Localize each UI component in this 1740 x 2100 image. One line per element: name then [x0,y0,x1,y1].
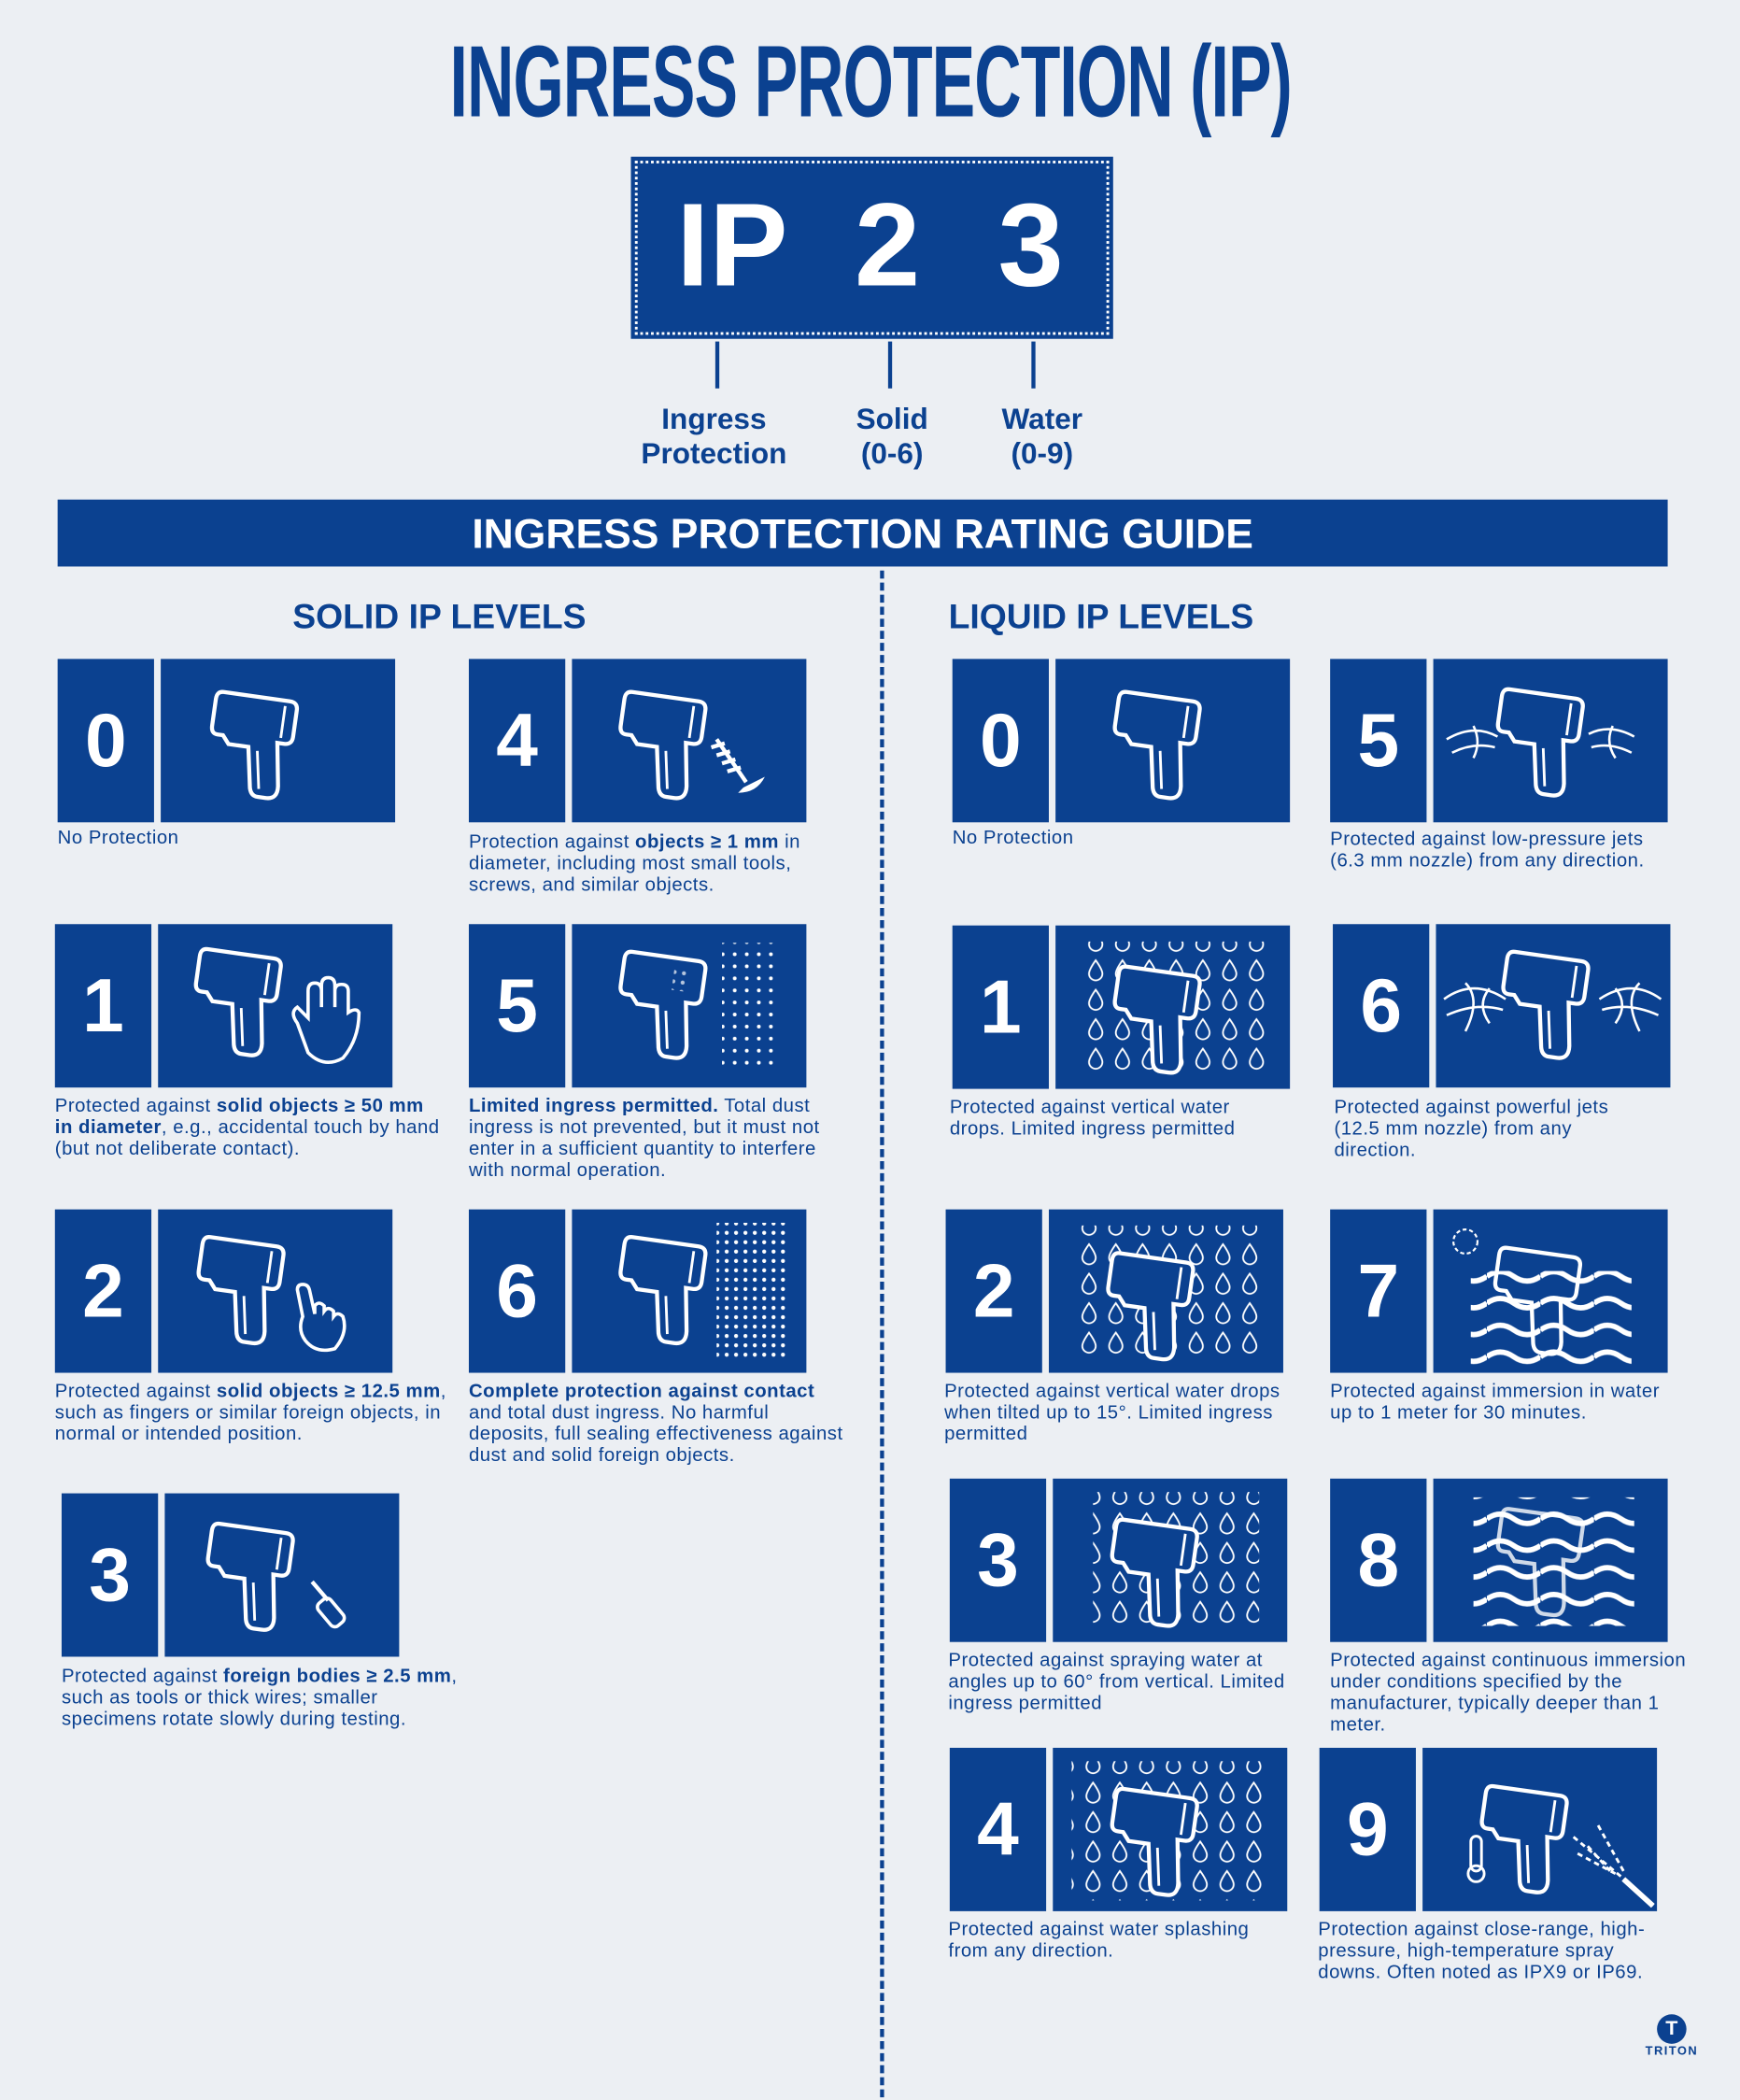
connector lines [715,342,719,389]
card: liquid 5: 5 [1357,698,1399,782]
desc: liquid 6: Protected against powerful jets (12.5 mm nozzle) from any direction. [1334,1097,1608,1161]
card: liquid 1: 1 [980,964,1022,1049]
card: solid 5: 5 [496,963,538,1047]
desc: solid 3: Protected against foreign bodies ≥ 2.5 mm, such as tools or thick wires; smaller specimens rotate slowly during testing. [62,1667,458,1730]
card: solid 6 [469,1209,807,1373]
card: solid 2 [54,1209,392,1373]
logo: triton: T [1665,2017,1677,2040]
card: liquid 8 [1330,1478,1668,1642]
card: liquid 4 [949,1747,1287,1911]
desc: liquid 1: Protected against vertical water drops. Limited ingress permitted [950,1097,1235,1140]
desc: liquid 7: Protected against immersion in water up to 1 meter for 30 minutes. [1330,1381,1660,1424]
label: solid [856,402,928,470]
card: liquid 7 [1330,1209,1668,1373]
desc: solid 0: No Protection [58,828,178,849]
IP code box: IP [676,178,788,311]
card: solid 0: 0 [85,698,127,782]
card: liquid 6 [1333,924,1670,1087]
card: liquid 2: 2 [973,1248,1015,1333]
card: solid 2: 2 [82,1248,124,1333]
card: liquid 2 [945,1209,1283,1373]
heading: liquid: LIQUID IP LEVELS [949,596,1253,636]
label: solid: Solid [856,402,928,435]
desc: solid 6: Complete protection against contact and total dust ingress. No harmful deposits, full sealing effectiveness against dust and solid foreign objects. [469,1381,843,1467]
desc: solid 5: Limited ingress permitted. Total dust ingress is not prevented, but it must not enter in a sufficient quantity to interfere with normal operation. [469,1096,820,1182]
card: liquid 1 [953,925,1291,1089]
label: water: (0-9) [1011,436,1073,470]
label: ingress protection: Ingress [661,402,767,435]
card: solid 3: 3 [89,1532,131,1616]
title: INGRESS PROTECTION (IP) [449,25,1291,139]
card: solid 0 [58,659,396,822]
IP code box: 3 [997,178,1064,311]
logo: triton [1646,2014,1698,2057]
card: solid 3 [62,1493,400,1657]
label: ingress protection [641,402,786,470]
desc: solid 2: Protected against solid objects ≥ 12.5 mm, such as fingers or similar foreign objects, in normal or intended position. [55,1381,446,1445]
IP code box: 2 [855,178,920,311]
desc: solid 4: Protection against objects ≥ 1 mm in diameter, including most small tools, screws, and similar objects. [469,831,800,896]
label: ingress protection: Protection [641,436,786,470]
card: liquid 0 [953,659,1291,822]
label: solid: (0-6) [861,436,923,470]
desc: liquid 8: Protected against continuous immersion under conditions specified by the manufacturer, typically deeper than 1 meter. [1330,1650,1686,1736]
card: liquid 3 [949,1478,1287,1642]
desc: liquid 2: Protected against vertical water drops when tilted up to 15°. Limited ingress permitted [944,1381,1280,1445]
divider [880,571,884,2097]
banner [58,500,1668,566]
label: water: Water [1002,402,1082,435]
desc: liquid 3: Protected against spraying water at angles up to 60° from vertical. Limited ingress permitted [948,1650,1285,1714]
desc: liquid 5: Protected against low-pressure jets (6.3 mm nozzle) from any direction. [1330,829,1645,872]
card: solid 6: 6 [496,1248,538,1333]
card: solid 4 [469,659,807,822]
card: liquid 9 [1319,1747,1657,1911]
desc: solid 1: Protected against solid objects ≥ 50 mm in diameter, e.g., accidental touch by hand (but not deliberate contact). [55,1096,440,1160]
card: solid 5 [469,924,807,1087]
desc: liquid 0: No Protection [953,828,1074,849]
card: solid 1 [54,924,392,1087]
heading: solid: SOLID IP LEVELS [292,596,587,636]
logo: triton: TRITON [1646,2044,1698,2057]
card: liquid 5 [1330,659,1668,822]
card: liquid 6: 6 [1360,963,1402,1047]
card: liquid 9: 9 [1347,1787,1389,1871]
card: solid 4: 4 [496,698,538,782]
IP code box [631,157,1113,339]
desc: liquid 4: Protected against water splashing from any direction. [948,1919,1249,1962]
desc: liquid 9: Protection against close-range, high-pressure, high-temperature spray downs. Often noted as IPX9 or IP69. [1318,1919,1645,1983]
card: liquid 4: 4 [977,1787,1019,1871]
card: solid 1: 1 [82,963,124,1047]
card: liquid 0: 0 [980,698,1022,782]
card: liquid 8: 8 [1357,1517,1399,1602]
card: liquid 7: 7 [1357,1248,1399,1333]
banner: INGRESS PROTECTION RATING GUIDE [472,510,1253,557]
label: water [1001,402,1082,470]
card: liquid 3: 3 [977,1517,1019,1602]
